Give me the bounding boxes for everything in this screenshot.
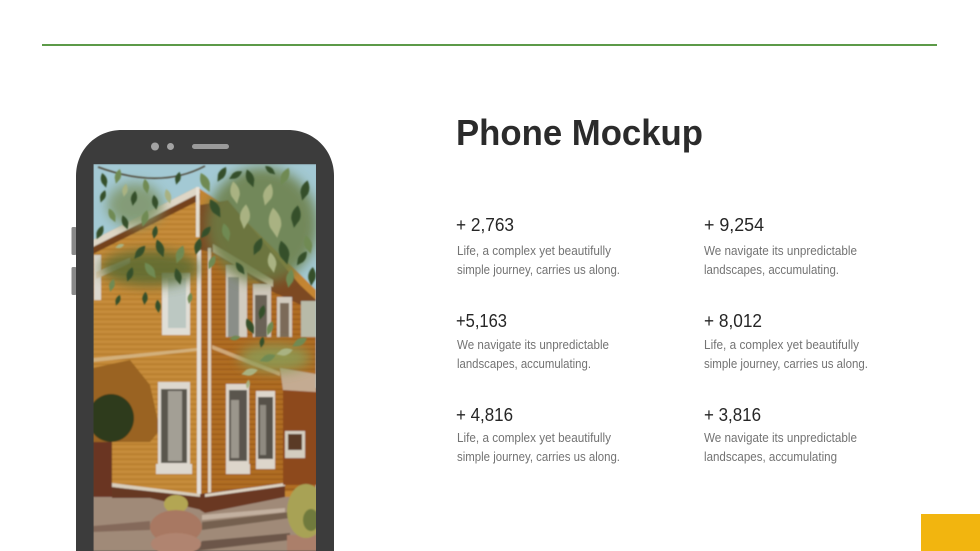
screen photo: orange house behind leaves <box>88 164 325 551</box>
stat description: We navigate its unpredictable <box>704 244 857 258</box>
stat description: Life, a complex yet beautifully <box>457 431 612 445</box>
stat number: +5,163 <box>456 311 507 331</box>
stat description: landscapes, accumulating <box>704 450 837 464</box>
stat description: Life, a complex yet beautifully <box>457 244 612 258</box>
leaf canopy <box>100 167 318 372</box>
planters <box>164 495 188 513</box>
stat: +4,816 <box>456 405 620 464</box>
camera dots <box>151 142 174 150</box>
stat description: Life, a complex yet beautifully <box>704 338 860 352</box>
stat description <box>704 338 868 371</box>
stat description <box>457 431 620 464</box>
stat description <box>457 338 609 371</box>
speaker <box>192 144 229 149</box>
stat description: landscapes, accumulating. <box>704 263 839 277</box>
stat description: landscapes, accumulating. <box>457 357 591 371</box>
stat: +9,254 <box>704 215 857 277</box>
stat description <box>457 244 620 277</box>
stat number: + 3,816 <box>704 405 761 425</box>
stat description: simple journey, carries us along. <box>457 450 620 464</box>
phone mockup <box>72 130 334 551</box>
stat description <box>704 244 857 277</box>
top divider line <box>42 44 937 46</box>
stat number: + 8,012 <box>704 311 762 331</box>
stat description: We navigate its unpredictable <box>704 431 857 445</box>
stat description <box>704 431 857 464</box>
stat number: + 9,254 <box>704 215 764 235</box>
ground and plinth <box>93 497 317 551</box>
stat: +3,816 <box>704 405 857 464</box>
yellow corner block <box>921 514 980 551</box>
stat number: + 4,816 <box>456 405 513 425</box>
title: Phone Mockup <box>456 112 703 153</box>
stat description: We navigate its unpredictable <box>457 338 609 352</box>
stat number: + 2,763 <box>456 215 514 235</box>
stat: +5,163 <box>456 311 609 371</box>
phone body <box>76 130 334 551</box>
stat: +2,763 <box>456 215 620 277</box>
stat description: simple journey, carries us along. <box>704 357 868 371</box>
stat description: simple journey, carries us along. <box>457 263 620 277</box>
side buttons <box>72 227 76 295</box>
stat: +8,012 <box>704 311 868 371</box>
